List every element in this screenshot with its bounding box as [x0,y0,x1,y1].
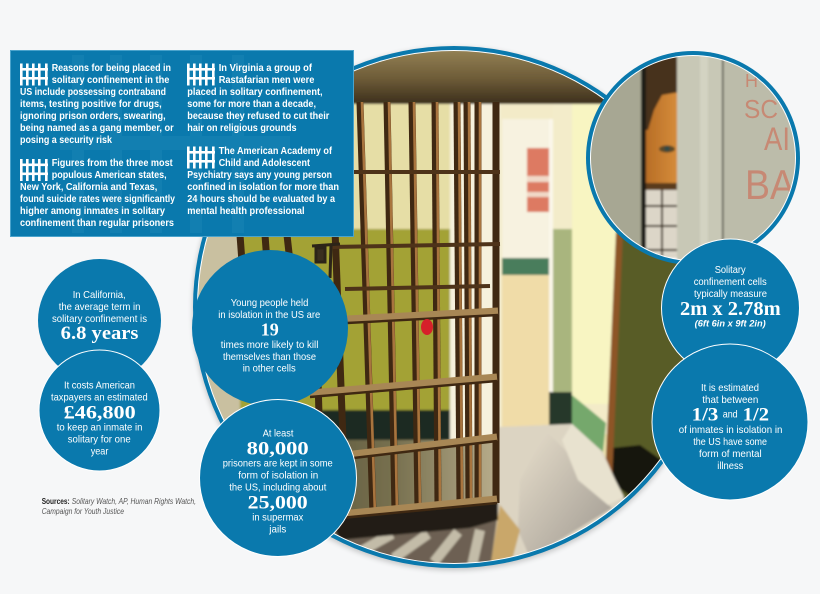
fact: reasons for isolation: being named as a gang member, or [20,123,174,134]
callout: cell dimensions [662,239,800,377]
callout: young people suicide risk: times more likely to kill [221,340,318,351]
handwriting on the door: AI [764,121,790,157]
fact: Rastafarian men in Virginia: Rastafarian men were [219,75,315,86]
callout: 80,000 prisoners in isolation [200,400,356,556]
fact: American Academy of Child and Adolescent Psychiatry: confined in isolation for more than [187,182,339,193]
sources note: Campaign for Youth Justice [42,507,125,516]
fact: reasons for isolation: ignoring prison orders, swearing, [20,111,166,122]
callout: California average term: solitary confinement is [52,314,147,325]
callout: mental illness share [652,344,808,500]
callout: mental illness share: form of mental [699,449,762,460]
sources note: Sources: [42,497,70,506]
callout: young people suicide risk: in isolation in the US are [218,310,321,321]
fact: American Academy of Child and Adolescent Psychiatry: Psychiatry says any young person [187,170,332,181]
handwriting on the door: H [745,71,758,91]
callout: 80,000 prisoners in isolation: the US, including about [229,482,326,494]
fact: Rastafarian men in Virginia: In Virginia a group of [219,63,313,74]
fact: American Academy of Child and Adolescent Psychiatry: Child and Adolescent [219,158,311,169]
callout: young people suicide risk [192,250,348,406]
fact: suicide rates: found suicide rates were significantly [20,194,175,205]
fact: reasons for isolation [20,63,174,146]
fact: suicide rates: higher among inmates in solitary [20,206,165,217]
fact: reasons for isolation: items, testing positive for drugs, [20,99,162,110]
handwriting on the door [745,74,791,199]
fact: reasons for isolation: Reasons for being placed in [52,63,171,74]
handwriting on the door: BA [745,161,795,208]
callout: young people suicide risk: in other cells [243,364,296,375]
icon: prison bars [187,64,215,86]
callout: cell dimensions: confinement cells [694,277,767,288]
callout: California average term: 6.8 years [61,323,138,344]
fact: American Academy of Child and Adolescent Psychiatry: 24 hours should be evaluated by a [187,194,335,205]
callout: 80,000 prisoners in isolation: form of isolation in [238,470,318,482]
callout: cost to taxpayers [39,350,160,471]
fact: Rastafarian men in Virginia [187,63,329,134]
fact: Rastafarian men in Virginia: some for more than a decade, [187,99,316,110]
fact: American Academy of Child and Adolescent Psychiatry [187,146,339,217]
callout: cell dimensions: 2m x 2.78m [680,298,781,320]
cell door bars [240,102,500,520]
curtain in the far room [527,148,550,212]
callout: 80,000 prisoners in isolation: 25,000 [248,494,308,514]
callout: cost to taxpayers: £46,800 [64,404,136,424]
callout: mental illness share: illness [717,461,743,472]
fact: suicide rates: confinement than regular prisoners [20,218,174,229]
icon: prison bars [20,159,48,181]
fact: American Academy of Child and Adolescent Psychiatry: mental health professional [187,206,305,217]
callout: California average term: the average term in [59,302,140,313]
callout: cell dimensions: typically measure [694,289,767,300]
callout: mental illness share: that between [702,395,758,406]
fact: suicide rates [20,158,175,229]
icon: prison bars [20,64,48,86]
fact: suicide rates: New York, California and Texas, [20,182,157,193]
callout: cost to taxpayers: solitary for one [68,434,131,446]
padlock and chain [312,244,340,278]
callout: mental illness share: of inmates in isolation in [679,425,782,436]
callout: cost to taxpayers: year [91,446,109,458]
fact: reasons for isolation: solitary confinement in the [52,75,170,86]
inset photo: face peering through door [585,50,809,270]
callout: young people suicide risk: themselves than those [223,352,316,363]
fact: American Academy of Child and Adolescent Psychiatry: The American Academy of [219,146,333,157]
red paint mark [421,319,433,335]
fact: Rastafarian men in Virginia: hair on religious grounds [187,123,297,134]
callout: 80,000 prisoners in isolation: in supermax [252,512,303,524]
panel: facts about solitary confinement [10,50,354,236]
callout: mental illness share: 1/2 [743,404,769,426]
callout: mental illness share: It is estimated [701,383,759,394]
callout: cost to taxpayers: to keep an inmate in [57,422,142,434]
callout: cost to taxpayers: taxpayers an estimated [51,392,148,404]
callout: mental illness share: and [723,410,738,420]
fact: reasons for isolation: posing a security risk [20,135,112,146]
callout: mental illness share: 1/3 [692,404,718,426]
callout: mental illness share: the US have some [693,437,767,448]
callout: 80,000 prisoners in isolation: At least [263,428,294,440]
fact: suicide rates: Figures from the three most [52,158,173,169]
callout: 80,000 prisoners in isolation: prisoners are kept in some [223,458,333,470]
sources note [42,497,196,516]
fact: reasons for isolation: US include possessing contraband [20,87,166,98]
fact: Rastafarian men in Virginia: because they refused to cut their [187,111,329,122]
icon: prison bars [187,146,215,168]
fact: suicide rates: populous American states, [52,170,167,181]
watermark prison bars [60,55,290,233]
callout: young people suicide risk: Young people held [231,298,309,309]
callout: California average term [38,259,161,382]
main photo: open cell door [190,40,720,570]
callout: 80,000 prisoners in isolation: 80,000 [247,440,309,460]
callout: cell dimensions: (6ft 6in x 9ft 2in) [695,318,766,328]
fact: Rastafarian men in Virginia: placed in solitary confinement, [187,87,323,98]
callout: California average term: In California, [73,290,126,301]
callout: young people suicide risk: 19 [261,320,279,340]
callout: 80,000 prisoners in isolation: jails [268,524,286,536]
sources note: Solitary Watch, AP, Human Rights Watch, [72,497,196,506]
callout: cost to taxpayers: It costs American [64,380,135,392]
handwriting on the door: SC [744,94,778,124]
callout: cell dimensions: Solitary [715,265,747,276]
